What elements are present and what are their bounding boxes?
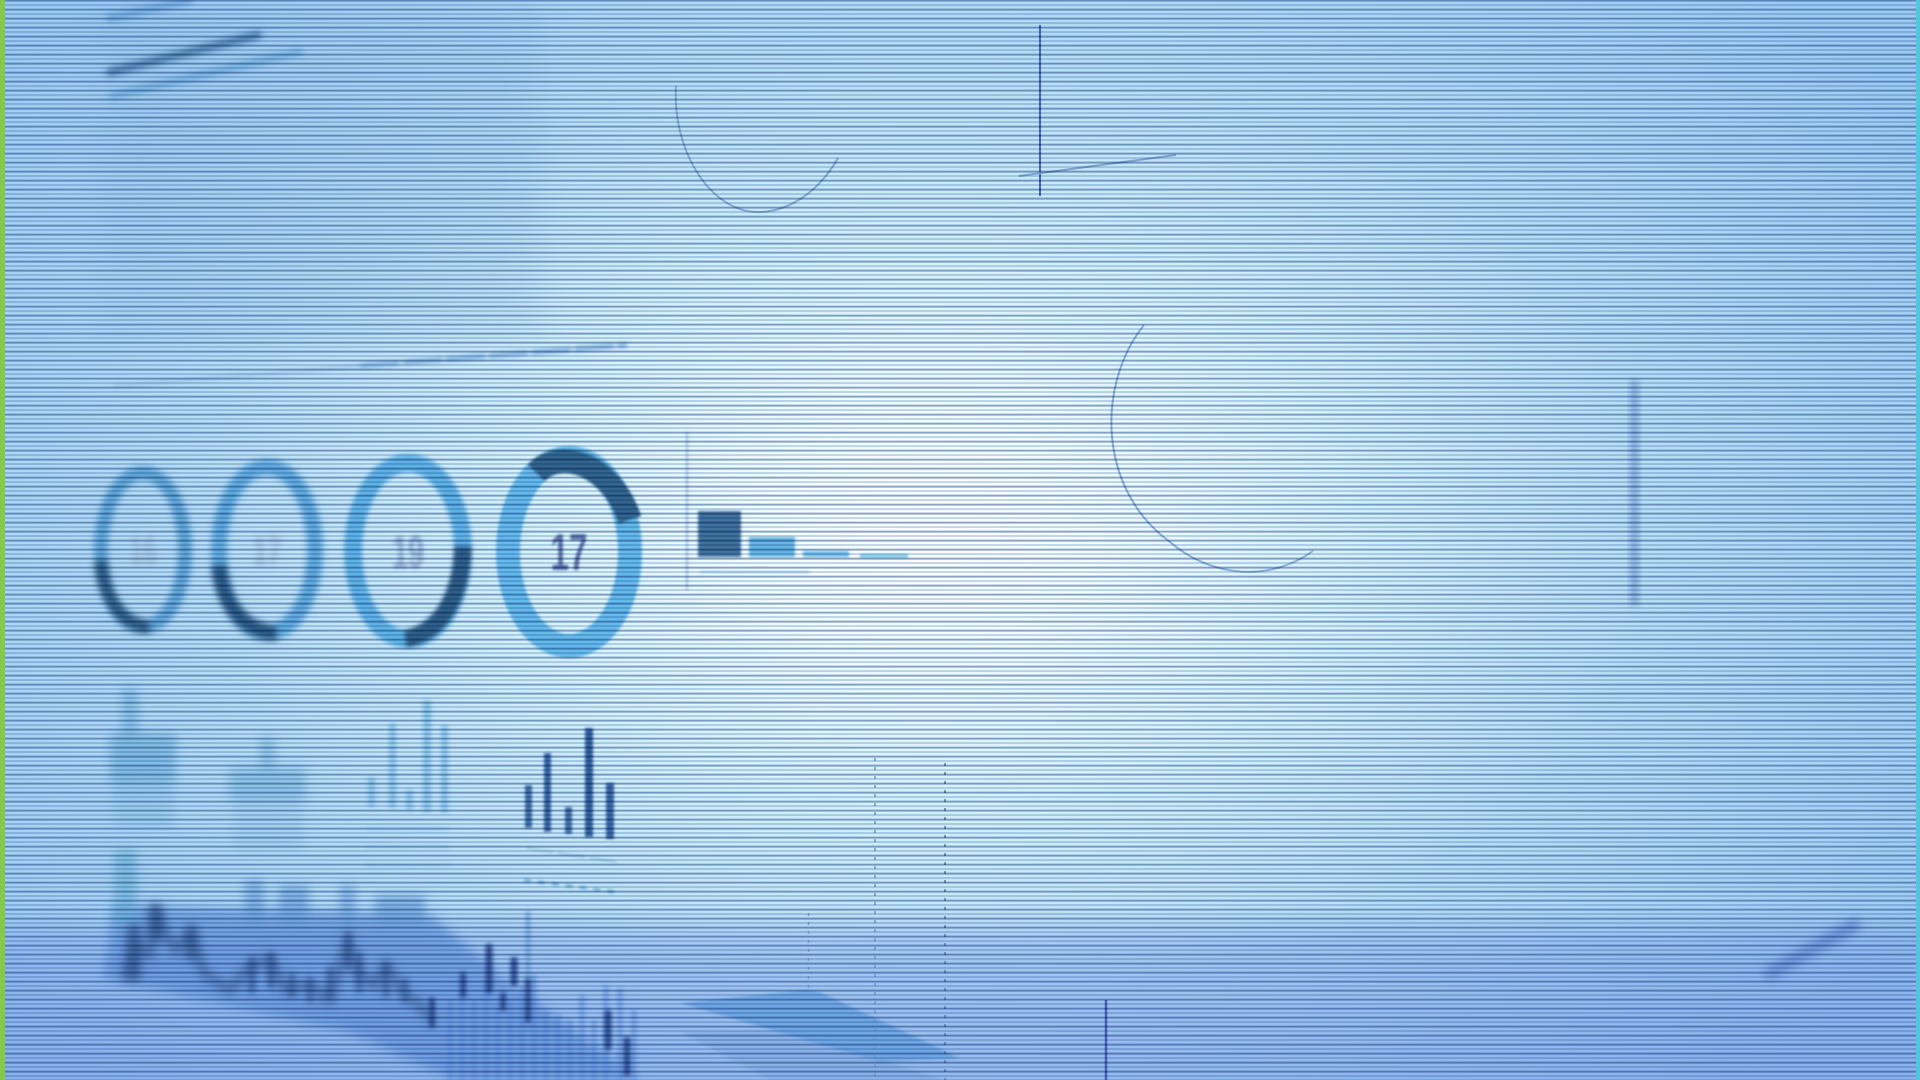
candlestick chart area — [103, 850, 640, 1080]
column chart 4 — [524, 728, 616, 892]
dotted vertical guides — [808, 758, 945, 1080]
long diagonal data line — [113, 345, 627, 386]
donut ring 1 — [101, 473, 185, 627]
top curve — [676, 86, 838, 212]
chart sharp foreground candles — [432, 913, 627, 1073]
chart blurred price trace — [125, 915, 432, 1020]
top-left blurred diagonal strokes — [110, 0, 300, 96]
donut ring 3: 19 — [392, 527, 424, 579]
donut ring 3 — [353, 463, 463, 639]
column chart 3 faded — [366, 700, 450, 867]
donut ring 2: 17 — [253, 528, 281, 575]
chart background plane — [103, 905, 640, 1080]
bottom vertical line — [1105, 1000, 1107, 1080]
column chart 2 faded — [229, 737, 306, 850]
right cyan edge — [1916, 0, 1920, 1080]
donut ring 1: 16 — [129, 529, 157, 574]
cross axis lines — [1019, 25, 1176, 196]
donut ring 4: 17 — [550, 524, 588, 582]
left green edge — [0, 0, 5, 1080]
large arc — [1111, 325, 1313, 572]
chart pale foreground columns — [450, 975, 634, 1080]
top-left faint panel — [100, 0, 540, 340]
stacked plane graphic — [680, 990, 960, 1080]
chart upper faded columns — [114, 850, 425, 925]
chart mid candles — [252, 935, 405, 1000]
donut ring 2 — [219, 467, 315, 633]
chart blurred rear candles — [134, 910, 191, 975]
right vertical blurred bar — [1630, 380, 1639, 606]
column chart 1 faded — [110, 688, 176, 828]
donut ring 4 — [508, 458, 630, 646]
small bar chart — [686, 432, 908, 590]
bottom-right blurred stroke — [1770, 925, 1855, 973]
